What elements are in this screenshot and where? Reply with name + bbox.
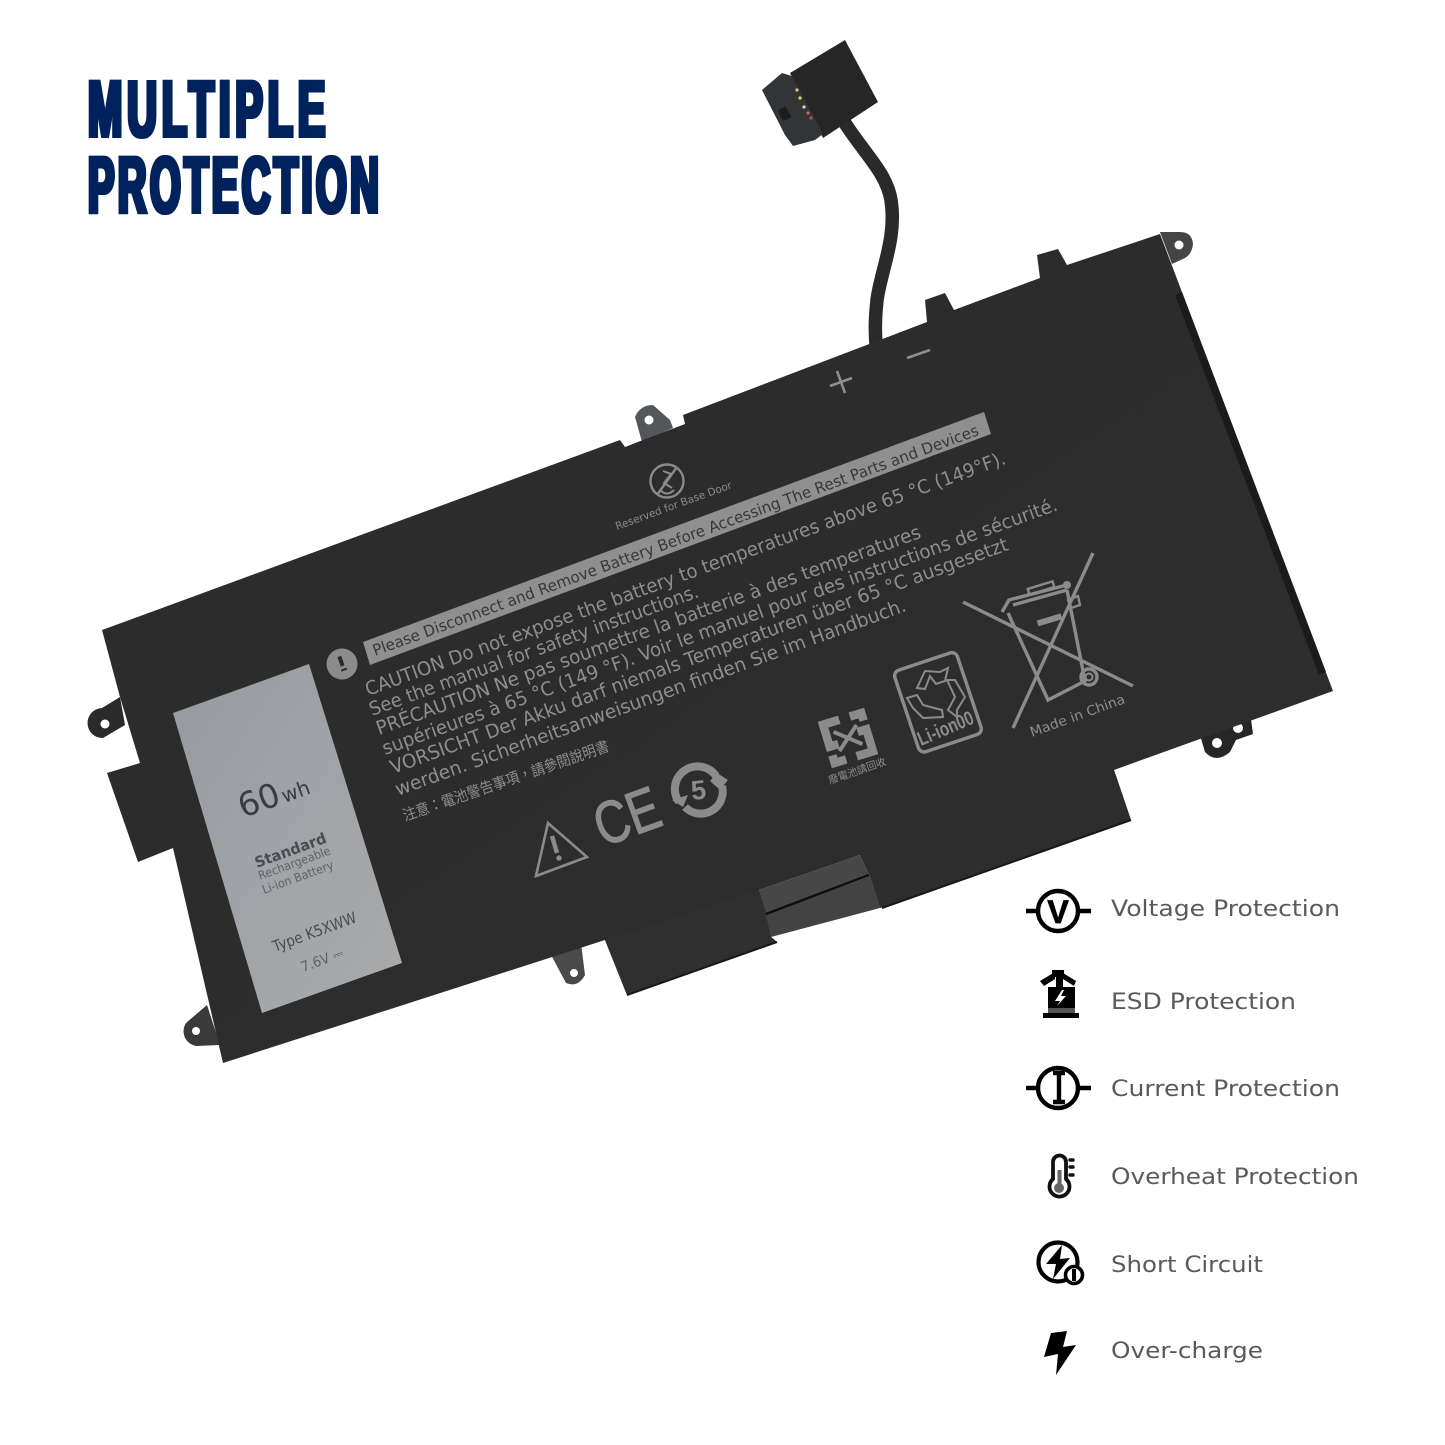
- title: multiple protection: MULTIPLE: [88, 66, 330, 154]
- CE mark: CE: [585, 774, 669, 859]
- icon: li-ion box: Li-ion00: [914, 707, 977, 751]
- icon: esd: [1040, 970, 1079, 1018]
- type text: Type K5XWW: [269, 909, 359, 956]
- icon: current: [1026, 1068, 1091, 1108]
- icon: over-charge bolt: [1044, 1331, 1076, 1375]
- icon: recycle 5: [672, 766, 728, 814]
- li-ion text: Li-ion Battery: [260, 858, 336, 897]
- warning text block: CAUTION Do not expose the battery to temperatures above 65 °C (149°F).: [362, 447, 1009, 701]
- warning banner: Please Disconnect and Remove Battery Before Accessing The Rest Parts and Devices: [370, 422, 981, 660]
- front bulge panels: [605, 770, 1131, 995]
- battery spec label: [173, 664, 402, 1013]
- icon: voltage: V: [1047, 894, 1069, 930]
- warning text block: VORSICHT Der Akku darf niemals Temperaturen über 65 °C ausgesetzt: [387, 534, 1011, 779]
- recycle caption: 廢電池請回收: [827, 755, 888, 787]
- warning text block: [362, 447, 1060, 825]
- icon: crossed-out bin: [963, 553, 1133, 728]
- standard text: Standard: [252, 829, 329, 872]
- protection list: [1026, 891, 1359, 1375]
- right edge shading: [1175, 292, 1326, 675]
- label: overheat protection: Overheat Protection: [1111, 1165, 1359, 1190]
- icon: recycling mark: [823, 713, 873, 763]
- voltage text: 7.6V ⎓: [299, 946, 346, 976]
- icon: short circuit: [1038, 1242, 1082, 1284]
- warning text block: supérieures à 65 °C (149 °F). Voir le manuel pour des instructions de sécurité.: [379, 494, 1060, 760]
- label: short circuit: Short Circuit: [1111, 1253, 1263, 1278]
- title: multiple protection: [88, 66, 382, 230]
- title: multiple protection: PROTECTION: [88, 141, 382, 230]
- icon: caution circle: [322, 644, 362, 684]
- connector cable: [762, 40, 892, 344]
- warning text block: See the manual for safety instructions.: [366, 581, 702, 721]
- warning text block: PRÉCAUTION Ne pas soumettre la batterie à des temperatures: [373, 520, 924, 740]
- icon: thermometer: [1049, 1156, 1073, 1197]
- battery body: [102, 234, 1333, 1063]
- label: current protection: Current Protection: [1111, 1077, 1340, 1102]
- icon: warning triangle: [536, 823, 587, 876]
- icon: voltage: [1026, 891, 1091, 931]
- icon: li-ion box: [893, 651, 983, 754]
- label: esd protection: ESD Protection: [1111, 990, 1296, 1015]
- label: over-charge: Over-charge: [1111, 1339, 1263, 1364]
- icon: reserved for base door: [650, 464, 684, 498]
- label: voltage protection: Voltage Protection: [1111, 897, 1340, 922]
- polarity marks: [830, 350, 930, 393]
- warning text block: werden. Sicherheitsanweisungen finden Sie im Handbuch.: [392, 595, 909, 801]
- battery ears: [87, 232, 1253, 1046]
- rechargeable text: Rechargeable: [256, 844, 332, 883]
- warning text block: 注意：電池警告事項，請參閱說明書: [400, 737, 611, 825]
- icon: recycle 5: 5: [689, 775, 708, 806]
- made in china: Made in China: [1028, 692, 1127, 741]
- base door text: Reserved for Base Door: [614, 479, 734, 533]
- capacity: 60wh: [232, 764, 314, 826]
- battery product: [87, 40, 1333, 1063]
